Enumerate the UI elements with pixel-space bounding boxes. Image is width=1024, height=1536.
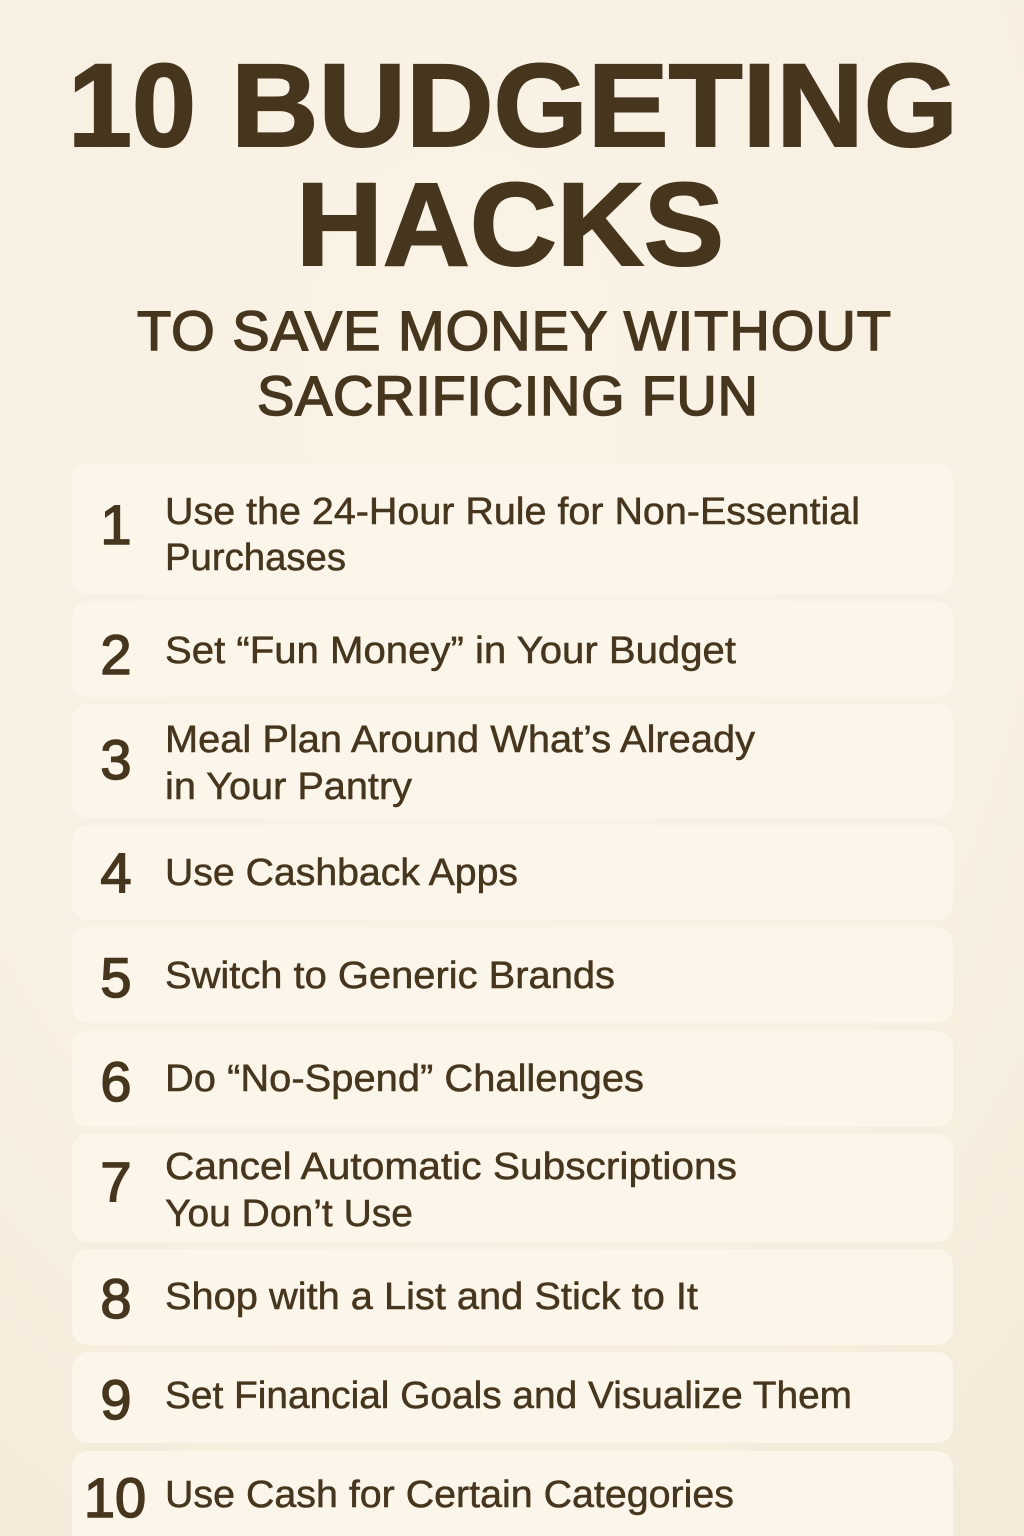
subtitle: [137, 299, 891, 427]
panel: hack 6: [72, 1031, 953, 1127]
panel: hack 5: [72, 927, 953, 1023]
panel: hack 6: Do “No-Spend” Challenges: [165, 1058, 644, 1100]
panel: hack 9: [72, 1352, 953, 1443]
panel: hack 7: Cancel Automatic Subscriptions: [165, 1146, 737, 1188]
panel: hack 4: [72, 825, 953, 920]
title: [68, 40, 958, 291]
subtitle: SACRIFICING FUN: [257, 364, 758, 427]
panel: hack 10: Use Cash for Certain Categories: [165, 1474, 734, 1516]
panel: hack 5: Switch to Generic Brands: [165, 955, 615, 997]
panel: hack 4: 4: [100, 841, 132, 904]
panel: hack 5: 5: [100, 946, 132, 1009]
panel: hack 9: 9: [100, 1368, 132, 1431]
panel: hack 3: Meal Plan Around What’s Already: [165, 719, 755, 761]
panel: hack 4: Use Cashback Apps: [165, 852, 518, 894]
panel: hack 9: Set Financial Goals and Visualize Them: [165, 1375, 852, 1417]
panel: hack 3: [72, 704, 953, 818]
panel: hack 1: [72, 464, 953, 594]
panel: hack 2: 2: [100, 623, 132, 686]
title: HACKS: [296, 159, 724, 291]
panel: hack 2: Set “Fun Money” in Your Budget: [165, 630, 736, 672]
panel: hack 7: You Don’t Use: [165, 1193, 413, 1235]
panel: hack 1: Purchases: [165, 537, 346, 579]
panel: hack 3: 3: [100, 728, 132, 791]
title: 10: [68, 40, 196, 172]
panel: hack 7: [72, 1134, 953, 1242]
panel: hack 1: Use the 24-Hour Rule for Non-Essential: [165, 491, 860, 533]
panel: hack 7: 7: [100, 1150, 132, 1213]
panel: hack 8: Shop with a List and Stick to It: [165, 1276, 698, 1318]
title: BUDGETING: [231, 40, 958, 172]
subtitle: TO SAVE MONEY WITHOUT: [137, 299, 891, 362]
panel: hack 8: 8: [100, 1267, 132, 1330]
panel: hack 2: [72, 601, 953, 697]
panel: hack 1: 1: [100, 493, 132, 556]
panel: hack 6: 6: [100, 1050, 132, 1113]
panel: hack 8: [72, 1249, 953, 1345]
panel: hack 10: [72, 1451, 953, 1536]
panel: hack 3: in Your Pantry: [165, 766, 412, 808]
panel: hack 10: 10: [84, 1466, 146, 1529]
